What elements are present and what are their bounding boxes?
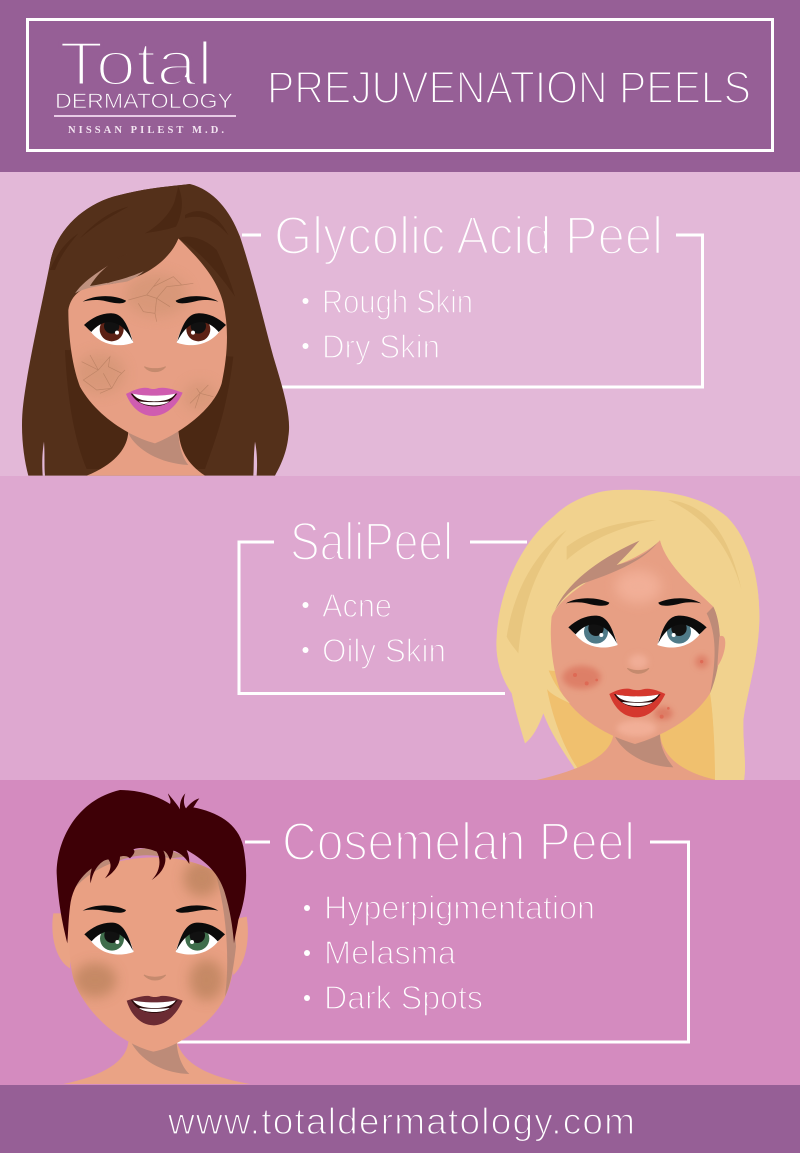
eyebrows xyxy=(566,598,701,606)
illustration: brunette woman with dry skin xyxy=(22,184,289,476)
logo: Total Dermatology: NISSAN PILEST M.D. xyxy=(68,125,224,136)
eyes xyxy=(84,313,226,345)
list: cosemelan xyxy=(304,889,595,1016)
heading: Cosemelan Peel: Cosemelan Peel xyxy=(282,812,635,872)
title: PREJUVENATION PEELS xyxy=(267,62,751,113)
nose xyxy=(144,975,166,980)
connector: salipeel xyxy=(239,542,527,694)
header frame xyxy=(28,20,772,150)
list: cosemelan: Dark Spots xyxy=(324,979,483,1016)
footer url: www.totaldermatology.com xyxy=(167,1101,635,1142)
footer band xyxy=(0,1085,800,1153)
connector: glycolic xyxy=(242,235,702,387)
acne patches xyxy=(562,655,708,720)
logo: Total Dermatology: DERMATOLOGY xyxy=(55,90,233,113)
logo: Total Dermatology: Total xyxy=(59,30,213,99)
connector: cosemelan xyxy=(176,842,688,1042)
lips xyxy=(126,388,183,416)
eyebrows xyxy=(83,905,218,913)
eyebrows xyxy=(83,296,218,303)
list: salipeel xyxy=(302,587,446,669)
lips xyxy=(127,996,183,1025)
list: salipeel: Oily Skin xyxy=(322,632,446,669)
logo: Total Dermatology xyxy=(54,30,236,136)
list: glycolic: Dry Skin xyxy=(322,328,440,365)
list: glycolic xyxy=(302,283,473,365)
nose xyxy=(627,654,649,673)
illustration: short-haired woman with dark spots xyxy=(52,790,250,1084)
dry skin patches xyxy=(75,273,217,412)
heading: SaliPeel: SaliPeel xyxy=(290,512,453,572)
short hair xyxy=(57,790,246,943)
illustration: blonde woman with acne xyxy=(496,490,759,780)
list: cosemelan: Hyperpigmentation xyxy=(324,889,595,926)
list: glycolic: Rough Skin xyxy=(322,283,473,320)
dark spots xyxy=(73,860,224,1001)
eyes xyxy=(568,616,707,648)
eyes xyxy=(84,923,225,955)
list: cosemelan: Melasma xyxy=(324,934,457,971)
lips xyxy=(609,689,665,717)
nose xyxy=(144,367,166,372)
list: salipeel: Acne xyxy=(322,587,392,624)
heading: Glycolic Acid Peel: Glycolic Acid Peel xyxy=(274,206,663,266)
